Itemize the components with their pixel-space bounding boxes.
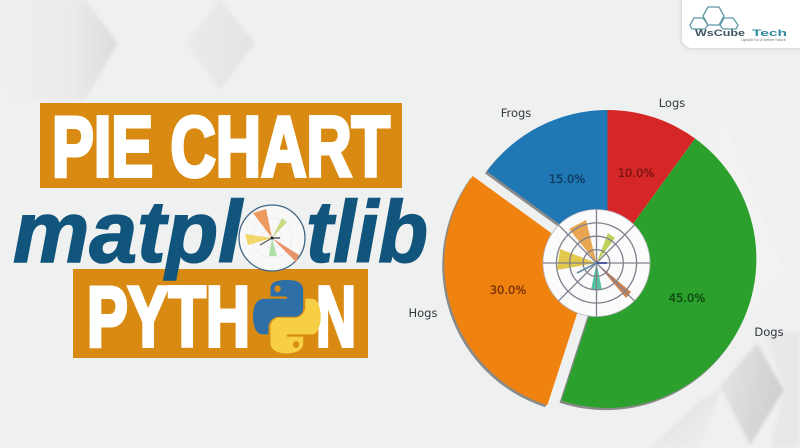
logo text — [695, 28, 787, 39]
logo: wscube tech — [682, 0, 800, 48]
label: hogs: Hogs — [409, 306, 437, 320]
wedge shadows — [442, 112, 755, 410]
wedge: hogs 30% — [444, 176, 593, 405]
label: dogs: Dogs — [754, 325, 784, 339]
label: frogs: Frogs — [501, 106, 531, 120]
wedge: logs 10% — [608, 110, 695, 259]
polar rose chart — [543, 210, 650, 316]
value: dogs: 45.0% — [669, 291, 705, 305]
heading: matplotlib: tlib — [306, 184, 428, 281]
wedge: frogs 15% — [487, 110, 608, 259]
icon: matplotlib polar logo — [239, 205, 305, 271]
icon: hexagons — [690, 7, 738, 29]
logo text: WsCube — [695, 28, 745, 39]
wedge: dogs 45% — [562, 138, 756, 408]
logo text: Tech — [752, 28, 787, 39]
value: logs: 10.0% — [618, 166, 654, 180]
icon: python logo — [253, 280, 321, 354]
value: hogs: 30.0% — [490, 283, 526, 297]
heading: matplotlib: matpl — [13, 184, 244, 281]
heading: pie chart: PIE CHART — [52, 100, 390, 195]
label: logs: Logs — [659, 96, 685, 110]
heading: python: N — [316, 270, 356, 365]
logo tagline: Upskill for a better future — [741, 38, 786, 42]
heading: python: PYTH — [87, 270, 250, 365]
pie chart — [409, 96, 784, 410]
banner: pie chart — [40, 100, 402, 195]
banner: python — [73, 269, 368, 365]
value: frogs: 15.0% — [549, 172, 585, 186]
heading: matplotlib — [13, 184, 428, 281]
